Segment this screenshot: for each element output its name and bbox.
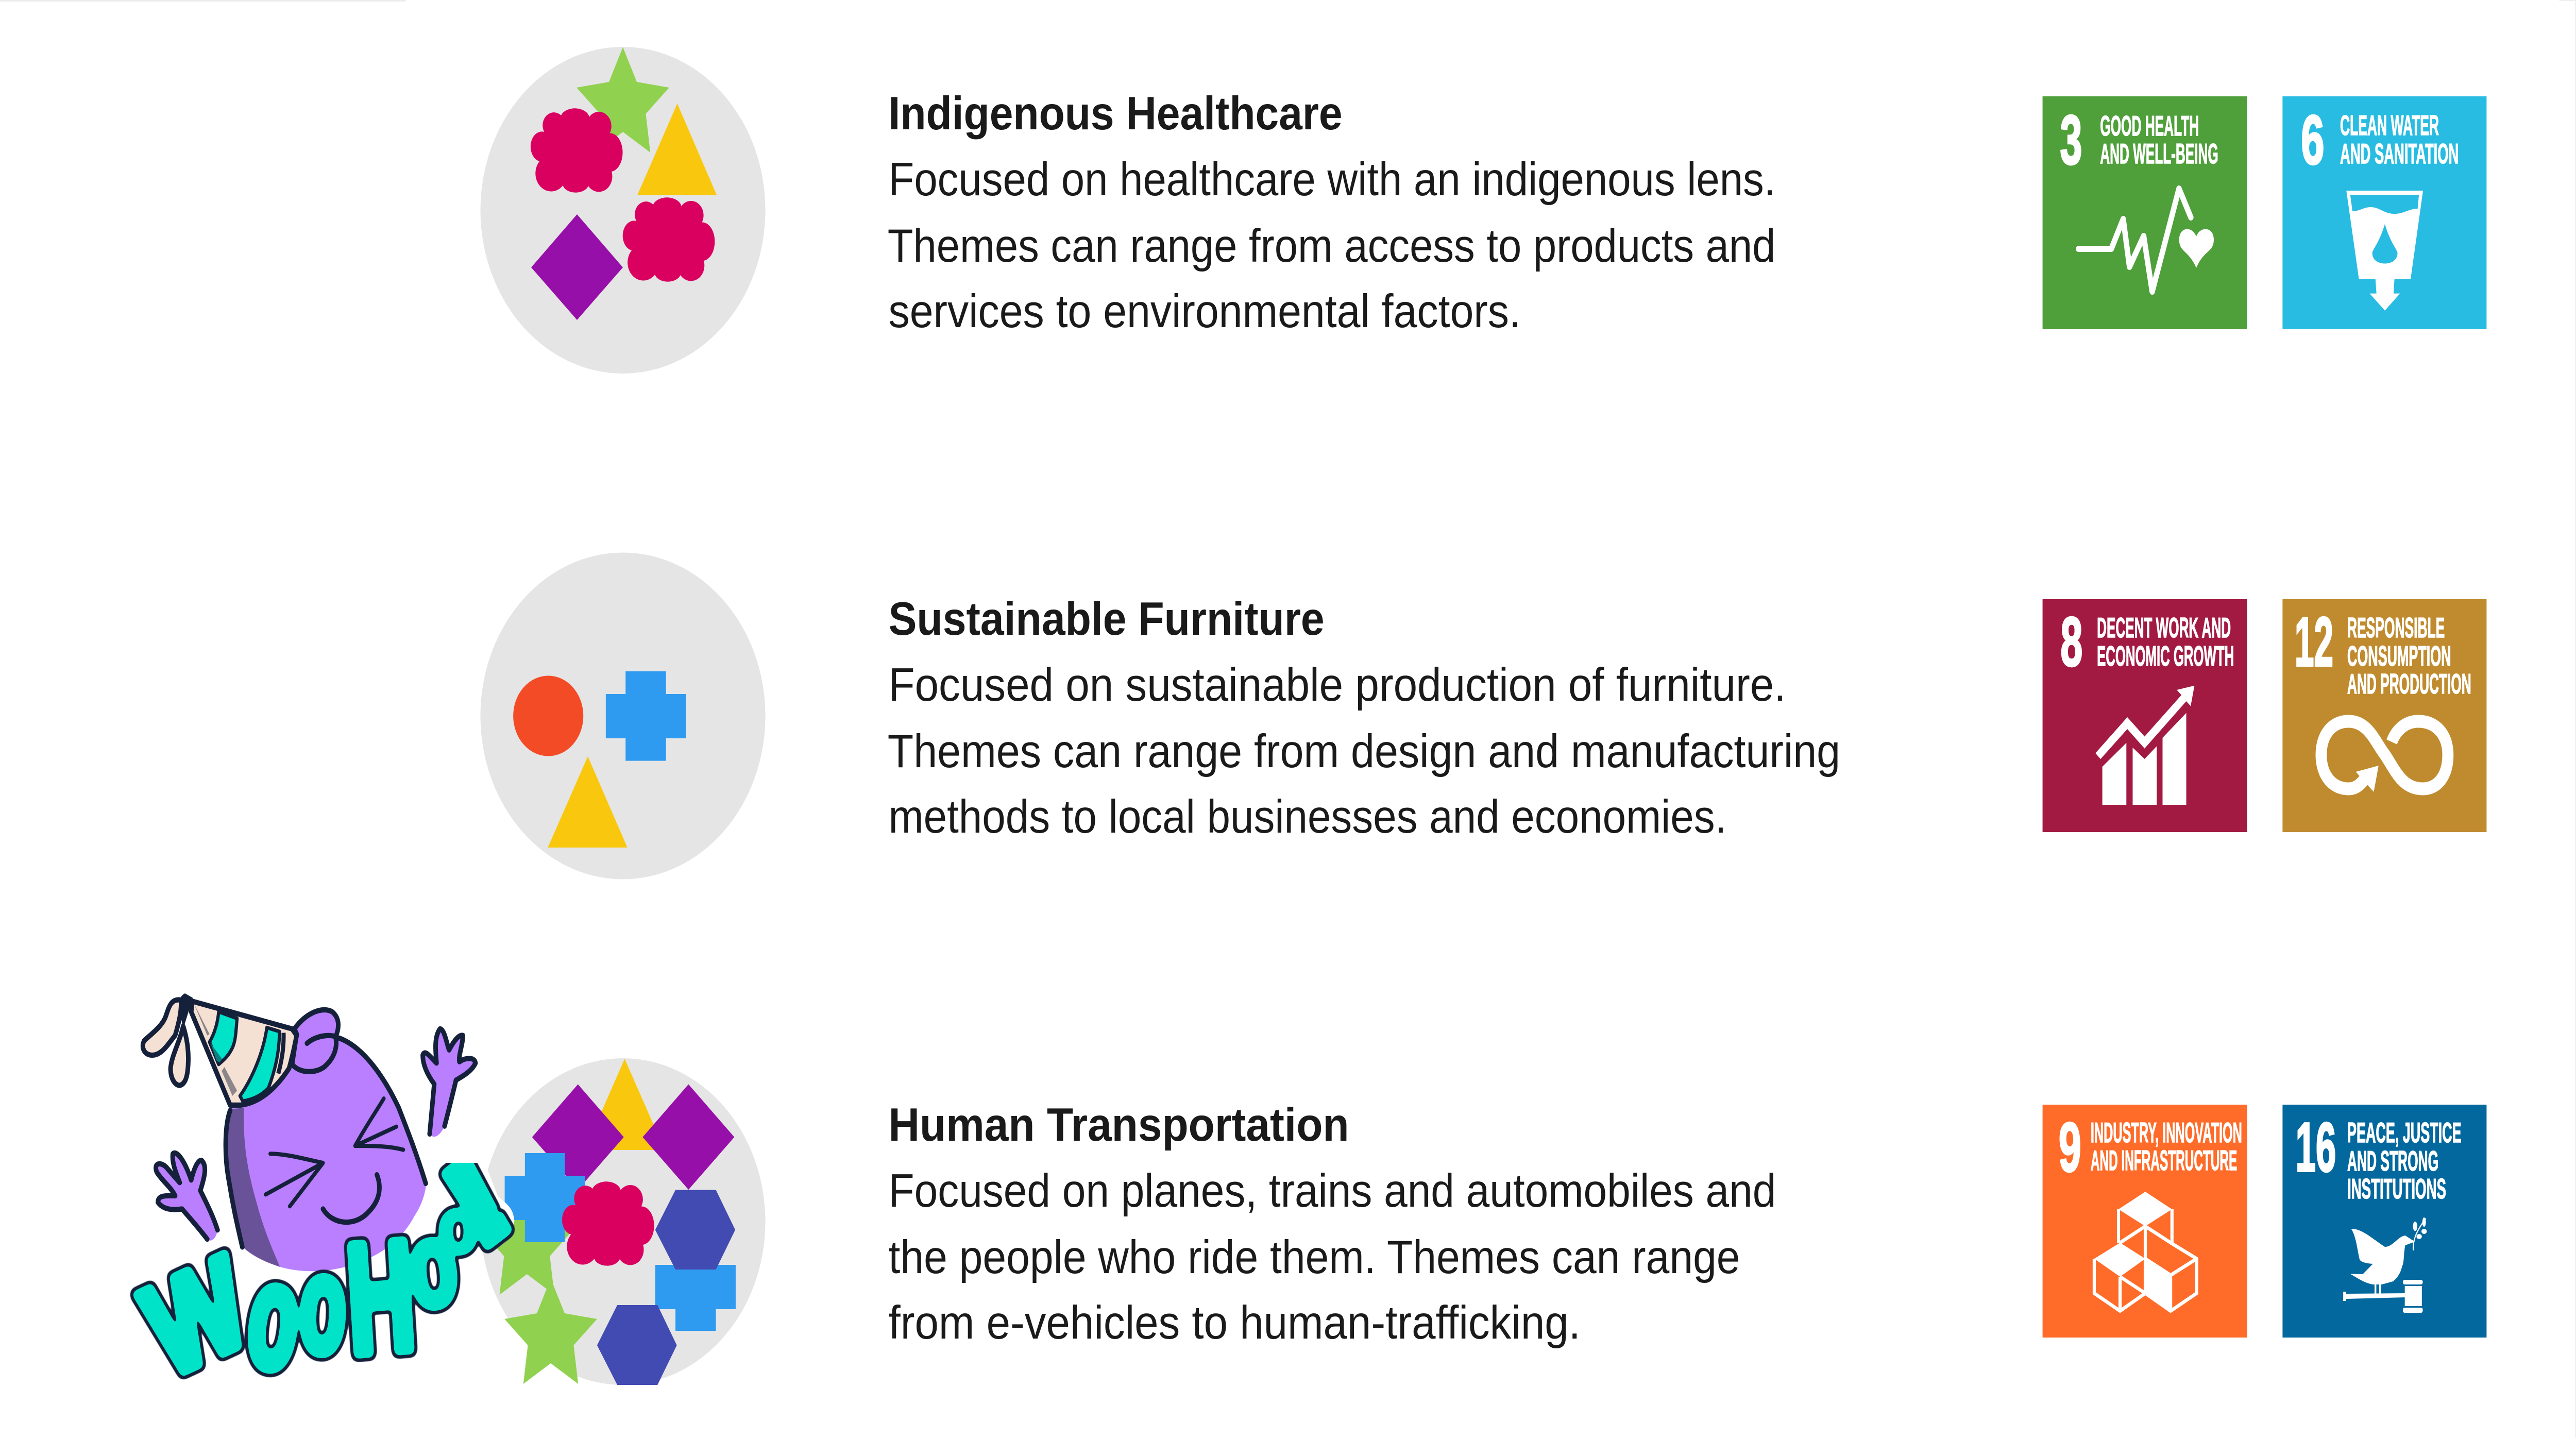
icon: shape circle 1 (480, 47, 766, 374)
icon: SDG 12 responsible consumption and production: AND PRODUCTION (2347, 668, 2471, 700)
lettering: WooHoo! (128, 1127, 532, 1406)
icon: SDG 6 clean water and sanitation: 6 (2301, 100, 2325, 179)
lettering: WooHoo!: o (240, 1231, 309, 1401)
party hat (143, 993, 297, 1105)
text block: human transportation description (889, 1165, 1776, 1349)
icon: SDG 6 clean water and sanitation (2282, 96, 2486, 329)
text block: human transportation description: from e-vehicles to human-trafficking. (889, 1297, 1581, 1349)
icon: SDG 16 peace, justice and strong institutions: AND STRONG (2347, 1145, 2438, 1177)
icon: SDG 16 peace, justice and strong institutions: PEACE, JUSTICE (2347, 1116, 2462, 1148)
icon: SDG 9 industry, innovation and infrastructure (2043, 1105, 2247, 1338)
lettering: WooHoo!: ! (421, 1127, 532, 1276)
text block: sustainable furniture description: methods to local businesses and economies. (889, 791, 1726, 843)
icon: SDG 6 clean water and sanitation: AND SANITATION (2340, 138, 2459, 170)
icon: SDG 12 responsible consumption and production: 12 (2295, 602, 2333, 681)
icon: shape circle 3 (449, 1058, 766, 1385)
row: sustainable furniture (480, 552, 2486, 879)
lettering: WooHoo!: o (297, 1227, 350, 1382)
character face (266, 1098, 403, 1222)
text block: human transportation description: Focused on planes, trains and automobiles and (889, 1165, 1776, 1217)
text block: sustainable furniture description (888, 659, 1840, 843)
lettering: WooHoo!: H (343, 1208, 419, 1386)
heading: sustainable furniture: Sustainable Furniture (889, 593, 1325, 645)
icon: SDG 3 good health and well-being: GOOD HEALTH (2100, 110, 2199, 142)
icon: SDG 9 industry, innovation and infrastructure: INDUSTRY, INNOVATION (2091, 1116, 2242, 1148)
text block: human transportation description: the people who ride them. Themes can range (889, 1231, 1740, 1283)
icon: SDG 6 clean water and sanitation: CLEAN WATER (2340, 109, 2439, 141)
icon: SDG 16 peace, justice and strong institutions: INSTITUTIONS (2347, 1173, 2446, 1205)
text block: indigenous healthcare description: Focused on healthcare with an indigenous lens. (889, 154, 1775, 206)
icon: SDG 9 industry, innovation and infrastructure: 9 (2059, 1108, 2081, 1186)
lettering: WooHoo!: o (401, 1196, 463, 1333)
icon: SDG 3 good health and well-being (2043, 96, 2247, 329)
icon: SDG 12 responsible consumption and production: CONSUMPTION (2347, 640, 2451, 672)
icon: shape circle 2 (480, 552, 766, 879)
text block: sustainable furniture description: Focused on sustainable production of furniture. (889, 659, 1786, 711)
icon: SDG 16 peace, justice and strong institutions: 16 (2296, 1108, 2336, 1186)
character right hand (423, 1029, 476, 1137)
text block: indigenous healthcare description (888, 154, 1775, 337)
row: indigenous healthcare (480, 47, 2486, 374)
heading: human transportation: Human Transportation (889, 1099, 1349, 1151)
illustration: WooHoo party sticker (128, 993, 532, 1406)
character body (226, 1038, 426, 1271)
icon: SDG 3 good health and well-being: AND WELL-BEING (2100, 138, 2218, 170)
text block: sustainable furniture description: Themes can range from design and manufacturing (888, 725, 1840, 777)
icon: SDG 8 decent work and economic growth: 8 (2060, 602, 2082, 681)
icon: SDG 9 industry, innovation and infrastructure: AND INFRASTRUCTURE (2091, 1144, 2237, 1176)
icon: SDG 12 responsible consumption and production (2282, 599, 2486, 832)
lettering: WooHoo!: o (439, 1182, 478, 1268)
icon: SDG 12 responsible consumption and production: RESPONSIBLE (2347, 612, 2445, 644)
lettering: WooHoo!: W (128, 1228, 264, 1406)
character ear (292, 1010, 338, 1072)
character left hand (156, 1153, 217, 1241)
icon: SDG 8 decent work and economic growth: ECONOMIC GROWTH (2097, 640, 2234, 672)
icon: SDG 8 decent work and economic growth: DECENT WORK AND (2097, 612, 2231, 644)
text block: indigenous healthcare description: services to environmental factors. (889, 285, 1521, 337)
heading: indigenous healthcare: Indigenous Healthcare (889, 88, 1343, 140)
icon: SDG 8 decent work and economic growth (2043, 599, 2247, 832)
row: human transportation (449, 1058, 2486, 1385)
icon: SDG 3 good health and well-being: 3 (2060, 100, 2082, 179)
text block: indigenous healthcare description: Themes can range from access to products and (888, 220, 1775, 272)
icon: SDG 16 peace, justice and strong institutions (2282, 1105, 2486, 1338)
